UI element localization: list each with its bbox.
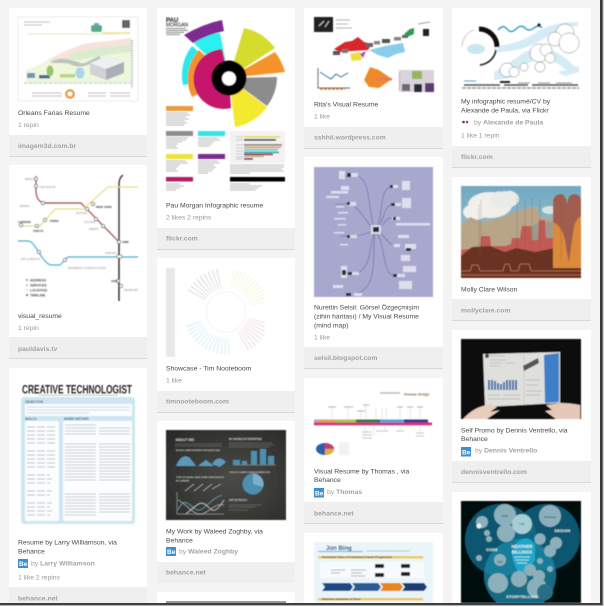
card text: Behance — [18, 548, 45, 556]
card text: Alexande de Paula, via Flickr — [461, 108, 549, 114]
venn diagram image: BILLINGS — [512, 550, 532, 554]
footer bar — [452, 299, 591, 320]
by-line dots icon — [462, 121, 468, 123]
card text: Resume by Larry Williamson, via — [18, 540, 117, 546]
metro map chart: NEW YORK — [96, 205, 113, 209]
card text: Showcase - Tim Nooteboom — [166, 366, 252, 372]
card text: 1 like — [314, 114, 330, 120]
card text — [166, 528, 263, 576]
card text: behance.net — [166, 570, 206, 576]
card text — [314, 304, 419, 362]
card text: dennisventrello.com — [461, 469, 527, 476]
metro map chart: RIO & HEALTH — [21, 257, 40, 261]
metro map chart: SMART — [89, 227, 99, 231]
Behance badge — [166, 547, 176, 556]
card text: 1 repin — [18, 122, 39, 129]
card: Molly Clare Wilson — [452, 177, 591, 321]
card text — [18, 540, 117, 602]
card text: 1 like — [314, 334, 330, 342]
card text: Self Promo by Dennis Ventrello, via — [461, 428, 568, 434]
card: Jon Bing resume — [304, 533, 443, 603]
legend: ADDRESS — [30, 278, 47, 282]
metro map chart: PARIS — [50, 219, 59, 223]
venn diagram image: HTML — [502, 515, 509, 518]
photo collage — [399, 70, 434, 92]
legend: TIMELINE — [30, 294, 46, 298]
footer bar — [157, 228, 295, 249]
card text: 1 like 2 repins — [18, 574, 61, 582]
card text: Behance — [461, 436, 488, 443]
card text — [461, 428, 568, 476]
venn diagram image: Photoshop — [544, 516, 557, 519]
footer bar — [157, 562, 295, 583]
card text: Nurettin Selsil: Görsel Özgeçmişim — [314, 304, 419, 312]
dark dashboard image: ROLES I HAVE WORKED FOR SINCE 1998 — [176, 449, 221, 452]
printed flyer photo — [461, 339, 581, 419]
card text: by Larry Williamson — [31, 560, 95, 568]
card text: behance.net — [314, 510, 354, 518]
Behance badge: Be — [167, 549, 176, 556]
card: Heather Billings venn diagram — [452, 492, 591, 607]
card text: Molly Clare Wilson — [461, 286, 517, 294]
metro map chart: MOTION — [76, 211, 87, 215]
card: partial bottom card column two — [157, 592, 295, 603]
career progression image: Seventeen Years of Consistent Career Progression — [322, 555, 392, 559]
footer bar — [304, 127, 443, 148]
metro map chart: OCTAVE — [84, 220, 95, 224]
card: Self Promo by Dennis Ventrello — [452, 330, 591, 483]
card text: mollyclare.com — [461, 308, 510, 314]
card text: visual_resume — [18, 313, 62, 320]
card text: imagem3d.com.br — [18, 143, 77, 150]
metro map chart: LONDON — [18, 220, 31, 224]
card text: by Waleed Zoghby — [179, 548, 238, 556]
timeline image: thomas design — [404, 392, 429, 396]
card text: (zihin haritası) / My Visual Resume — [314, 314, 419, 320]
Behance badge — [461, 447, 471, 456]
timeline image — [314, 392, 432, 455]
card text — [18, 110, 90, 150]
card text — [314, 468, 410, 518]
resume document image: WORK HISTORY — [64, 417, 90, 421]
radar chart — [364, 67, 392, 88]
dark dashboard image: TYPE OF WORK I HAVE DONE THROUGHOUT — [176, 476, 225, 479]
card: visual_resume — [9, 165, 147, 359]
career progression image: Selective Industries & Firms — [322, 597, 361, 601]
card text: Visual Resume by Thomas , via — [314, 468, 410, 476]
metro map chart: BERLIN — [25, 177, 35, 181]
card: Rita's Visual Resume — [304, 8, 443, 149]
metro map chart: TOKYO — [33, 229, 44, 233]
venn diagram image: HEATHER — [512, 544, 533, 549]
resume document image: SKILLS — [25, 417, 36, 421]
card: Nurettin Selsil mind map — [304, 157, 443, 369]
card: Showcase - Tim Nooteboom — [157, 258, 295, 413]
card text: behance.net — [18, 596, 58, 602]
card: My infographic resume Alexande de Paula — [452, 8, 591, 168]
venn diagram image: STORYTELLING — [506, 595, 538, 599]
footer bar — [304, 502, 443, 523]
dark dashboard image: MY CAREER — [176, 480, 190, 482]
bar chart — [230, 131, 285, 190]
card text — [166, 202, 263, 242]
card text — [166, 366, 252, 406]
card text: (mind map) — [314, 322, 348, 330]
card text: Behance — [314, 477, 341, 484]
metro map chart — [18, 175, 139, 301]
Behance badge — [18, 559, 28, 568]
metro map chart: STATION — [105, 251, 117, 255]
dark dashboard image: ABOUT ME: — [176, 438, 195, 442]
venn diagram image: CSS — [519, 523, 525, 526]
metro map chart: 1988 — [122, 240, 129, 244]
radial wheel infographic image: PAU — [166, 18, 178, 24]
card: Pau Morgan Infographic resume — [157, 8, 295, 250]
metro map chart: THE HAGUE — [39, 185, 55, 189]
Behance badge: Be — [462, 450, 471, 456]
legend: LOCATION — [30, 288, 48, 292]
venn diagram image: DESIGN — [555, 529, 570, 533]
card: Orleans Farias Resume — [9, 8, 147, 157]
card text: sshhii.wordpress.com — [314, 134, 386, 142]
card text: Behance — [166, 538, 193, 544]
card: Visual Resume by Thomas — [304, 378, 443, 524]
card text: 2 likes 2 repins — [166, 214, 212, 222]
card text: flickr.com — [166, 236, 198, 242]
card text — [314, 102, 386, 142]
card text — [461, 286, 517, 314]
venn diagram image: CODE — [486, 548, 498, 552]
footer bar — [157, 391, 295, 412]
radial timeline chart image — [166, 268, 260, 357]
resume document image: OBJECTIVE — [25, 400, 43, 404]
organic bubbles infographic image — [462, 22, 579, 88]
legend — [26, 278, 48, 298]
card text: flickr.com — [461, 154, 493, 161]
card text: by Thomas — [327, 489, 362, 496]
venn diagram image: PHP — [497, 561, 503, 564]
dark dashboard image: MY WORDS OF EXPERTISE — [229, 438, 262, 441]
career progression image — [314, 542, 433, 603]
radial wheel infographic image: MORGAN — [166, 22, 188, 28]
Behance badge — [314, 488, 324, 498]
card text: pauldavis.tv — [18, 346, 58, 353]
legend: SERVICES — [30, 284, 47, 288]
footer bar — [9, 587, 147, 603]
color-coded text blocks — [166, 106, 225, 190]
card text: My infographic resumé/CV by — [461, 98, 551, 106]
footer bar — [304, 347, 443, 368]
mind map image — [314, 167, 433, 297]
card text: My Work by Waleed Zoghby, via — [166, 528, 263, 536]
card text: timnooteboom.com — [166, 398, 229, 406]
card text: by Dennis Ventrello — [475, 448, 537, 454]
card: My Work by Waleed Zoghby — [157, 421, 295, 583]
footer bar — [452, 461, 591, 482]
chart image: layered area infographic — [18, 17, 138, 101]
metro map chart: NEWPORT — [124, 288, 139, 292]
resume document image — [21, 384, 135, 524]
footer bar — [452, 146, 591, 167]
card text: 1 repin — [18, 325, 39, 332]
card text: Rita's Visual Resume — [314, 102, 378, 108]
card text: Pau Morgan Infographic resume — [166, 202, 263, 210]
footer bar — [9, 337, 147, 358]
card text: 1 like 1 repin — [461, 132, 500, 140]
map style infographic image — [314, 17, 434, 92]
card text: by Alexande de Paula — [474, 120, 543, 126]
resume document image: CREATIVE TECHNOLOGIST — [22, 384, 132, 396]
card text: Orleans Farias Resume — [18, 110, 90, 117]
line chart — [318, 68, 350, 88]
footer bar — [9, 135, 147, 156]
Behance badge: Be — [315, 490, 324, 498]
career progression image: Jon Bing — [326, 546, 352, 552]
Behance badge: Be — [19, 561, 28, 568]
dark dashboard image: TYPE OF CLIENTS I HAVE WORKED FOR — [229, 471, 270, 474]
dark dashboard image — [166, 430, 286, 520]
layered landscape chart image — [461, 186, 581, 278]
metro map chart: VIENNA — [19, 204, 30, 208]
metro map chart: RESIDENCY & RESOLUTION — [68, 266, 106, 270]
dark dashboard image: GET IN TOUCH — [229, 499, 247, 502]
venn diagram image — [461, 501, 581, 607]
card text — [461, 98, 551, 161]
card text — [18, 313, 62, 353]
card text: selsil.blogspot.com — [314, 355, 377, 362]
card text: 1 like — [166, 378, 182, 384]
radial wheel infographic image — [166, 18, 285, 190]
metro map chart: 1996 — [111, 279, 118, 283]
card: Resume by Larry Williamson — [9, 368, 147, 603]
